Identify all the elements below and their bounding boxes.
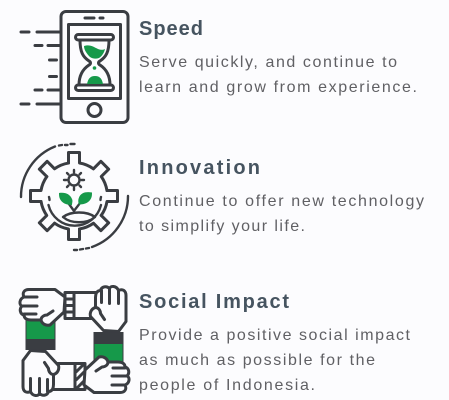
text: Speed description: learn and grow from experience. [139,79,417,96]
text: Social Impact description: as much as possible for the [139,352,375,369]
icon: gear with sprout [21,144,128,250]
heading: Innovation: Innovation [139,157,260,179]
text: Speed description: Serve quickly, and continue to [139,54,397,71]
text: Innovation description: Continue to offer new technology [139,193,424,210]
text: Innovation description [139,193,424,235]
text: Social Impact description [139,327,411,394]
text: Speed description [139,54,417,96]
text: Social Impact description: Provide a positive social impact [139,327,411,344]
heading: Social Impact: Social Impact [139,291,289,313]
left wrist band [26,319,55,350]
bottom-left hand [23,350,59,396]
icon: phone with hourglass [21,12,128,122]
top-left hand [20,290,65,325]
text: Innovation description: to simplify your life. [139,218,305,235]
bottom sleeve [53,364,85,390]
top-right hand [90,286,126,332]
icon: four linked hands [20,286,129,396]
top sleeve [65,292,97,318]
heading: Speed: Speed [139,18,203,40]
bottom-right hand [84,357,129,392]
text: Social Impact description: people of Indonesia. [139,377,315,394]
right wrist band [94,332,123,364]
